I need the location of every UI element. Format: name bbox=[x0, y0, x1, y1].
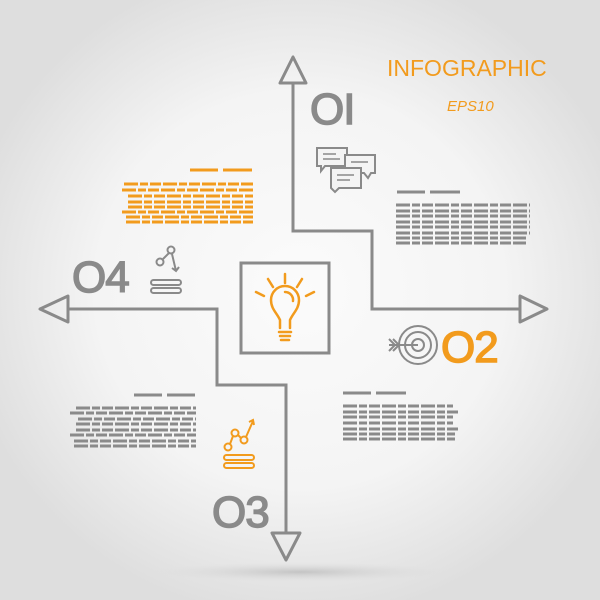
text block: top-right gray bbox=[396, 192, 530, 243]
icon: chat bubbles bbox=[317, 148, 375, 192]
text block: top-left orange bbox=[122, 170, 253, 222]
text block: bottom-left gray bbox=[70, 395, 196, 446]
icon: chart 03 bbox=[224, 420, 254, 468]
text block: bottom-right gray bbox=[343, 393, 460, 439]
icon: target bbox=[389, 326, 437, 364]
number 02: O2 bbox=[441, 323, 498, 372]
arrow: step 1 to 2 bbox=[280, 57, 547, 322]
subtitle: EPS10 bbox=[447, 98, 494, 115]
number 03: O3 bbox=[212, 488, 269, 537]
title: INFOGRAPHIC bbox=[387, 55, 547, 81]
arrow: step 3 to 4 bbox=[40, 296, 300, 560]
center box: lightbulb bbox=[241, 263, 329, 353]
icon: network 04 bbox=[151, 246, 181, 293]
number 04: O4 bbox=[72, 253, 129, 302]
number 01: OI bbox=[310, 85, 354, 134]
